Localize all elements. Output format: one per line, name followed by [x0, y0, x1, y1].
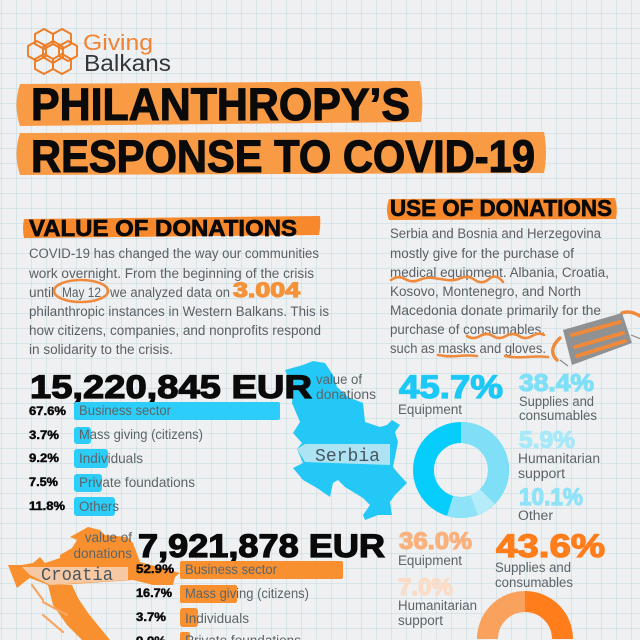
- logo word: Giving: Giving: [83, 30, 153, 55]
- bar labels: Individuals: [185, 611, 249, 626]
- intro paragraph: COVID-19 has changed the way our communities: [29, 246, 319, 261]
- icon: hexagon flower: [28, 29, 77, 74]
- bar labels: Business sector: [79, 403, 171, 418]
- paragraph: Kosovo, Montenegro, and North: [390, 284, 581, 299]
- stat: supplies: 43.6%: [496, 528, 605, 564]
- intro paragraph: how citizens, companies, and nonprofits respond: [29, 323, 321, 338]
- logo word: Balkans: Balkans: [84, 50, 171, 76]
- value caption: donations: [73, 546, 132, 561]
- bar labels: Private foundations: [79, 475, 195, 490]
- bar labels: Mass giving (citizens): [185, 586, 309, 601]
- stat: humanitarian: 5.9%: [519, 427, 575, 454]
- stat: equipment: 36.0%: [399, 528, 472, 555]
- circle around May 12: [54, 280, 108, 302]
- title: [16, 79, 546, 182]
- stat: equipment: [398, 369, 503, 417]
- stat: humanitarian: Humanitarian: [398, 598, 477, 613]
- intro paragraph: until: [29, 285, 54, 300]
- intro paragraph: we analyzed data on: [109, 285, 230, 300]
- panel: use of donations intro: [387, 195, 640, 366]
- stat: humanitarian: [518, 427, 600, 481]
- paragraph: [390, 226, 609, 356]
- stat: humanitarian: 7.0%: [398, 574, 453, 601]
- stat: equipment: 45.7%: [399, 369, 503, 405]
- bar labels: [185, 562, 309, 640]
- stat: supplies: [495, 528, 605, 590]
- Croatia label: Croatia: [41, 566, 113, 586]
- stat: supplies: consumables: [495, 575, 573, 590]
- intro paragraph: May 12: [62, 285, 101, 300]
- heading band: [23, 216, 320, 238]
- logo: Giving Balkans: [28, 29, 171, 76]
- value caption: value of: [316, 372, 362, 387]
- stat: supplies: Supplies and: [495, 560, 571, 575]
- icon: face mask: [553, 312, 640, 366]
- percentages: 11.8%: [29, 501, 65, 513]
- stat: other: 10.1%: [519, 484, 583, 511]
- map: Serbia: [285, 361, 407, 520]
- stat: humanitarian: support: [398, 613, 443, 628]
- bar labels: Individuals: [79, 451, 143, 466]
- stat: humanitarian: Humanitarian: [518, 451, 600, 466]
- percentages: 16.7%: [136, 588, 172, 600]
- paragraph: mostly give for the purchase of: [390, 246, 574, 261]
- bar labels: Mass giving (citizens): [79, 427, 203, 442]
- bars: [74, 402, 280, 516]
- percentages: 67.6%: [29, 406, 66, 418]
- Serbia shape: [285, 361, 407, 520]
- intro paragraph: work overnight. From the beginning of the crisis: [28, 266, 314, 281]
- highlighted number: 3.004: [233, 279, 300, 302]
- donut chart: Serbia: [424, 432, 498, 508]
- paragraph: Macedonia donate primarily for the: [390, 303, 601, 318]
- stat: supplies: Supplies and: [519, 394, 594, 409]
- percentages: 3.7%: [29, 430, 59, 442]
- bars: [180, 561, 343, 640]
- intro paragraph: [28, 246, 329, 357]
- percentages: [29, 406, 66, 513]
- stat: other: Other: [518, 508, 554, 523]
- title line 1: PHILANTHROPY’S: [31, 79, 410, 130]
- percentages: [136, 564, 174, 640]
- stat: equipment: Equipment: [398, 553, 462, 568]
- heading band: [387, 198, 617, 220]
- percentages: 9.2%: [29, 453, 59, 465]
- paragraph: such as masks and gloves.: [390, 341, 546, 356]
- paragraph: Serbia and Bosnia and Herzegovina: [390, 226, 601, 241]
- percentages: 52.9%: [136, 564, 174, 576]
- panel: Serbia use of donations: [398, 369, 600, 523]
- heading: USE OF DONATIONS: [390, 195, 612, 221]
- islands: [32, 585, 67, 632]
- total value: 7,921,878 EUR: [138, 528, 385, 564]
- stat: humanitarian: [398, 574, 477, 628]
- stat: humanitarian: support: [518, 466, 565, 481]
- Serbia label: Serbia: [315, 447, 380, 467]
- bar labels: [79, 403, 203, 514]
- stat: supplies: consumables: [519, 408, 597, 423]
- title band line 1: [16, 81, 422, 126]
- value caption: value of: [85, 530, 132, 545]
- paragraph: medical equipment. Albania, Croatia,: [390, 265, 609, 280]
- value caption: [73, 530, 132, 561]
- stat: other: [518, 484, 583, 523]
- panel: Serbia value bars: [29, 369, 376, 516]
- stat: equipment: Equipment: [398, 402, 462, 417]
- stat: equipment: [398, 528, 472, 568]
- Croatia shape: [8, 527, 180, 588]
- value caption: donations: [316, 387, 376, 402]
- panel: Croatia use of donations: [398, 528, 605, 639]
- panel: Croatia value bars: [73, 528, 385, 640]
- title band line 2: [16, 132, 546, 175]
- map: Croatia: [8, 527, 180, 640]
- intro paragraph: philanthropic instances in Western Balkans. This is: [29, 304, 329, 319]
- donut chart: Croatia: [488, 602, 562, 639]
- value caption: [316, 372, 376, 402]
- Serbia label ribbon: [297, 444, 390, 465]
- bar labels: Business sector: [185, 562, 277, 577]
- total value: 15,220,845 EUR: [30, 369, 312, 405]
- heading: VALUE OF DONATIONS: [29, 215, 297, 241]
- percentages: 3.7%: [136, 612, 166, 624]
- Croatia coast: [48, 585, 110, 640]
- paragraph: purchase of consumables,: [390, 322, 545, 337]
- title line 2: RESPONSE TO COVID-19: [31, 131, 535, 182]
- Croatia label ribbon: [22, 567, 128, 585]
- panel: value of donations intro: [23, 215, 329, 357]
- stat: supplies: [519, 370, 597, 423]
- bar labels: Others: [79, 499, 119, 514]
- stat: supplies: 38.4%: [519, 370, 594, 397]
- intro paragraph: in solidarity to the crisis.: [29, 342, 173, 357]
- squiggle underlines: [391, 277, 548, 357]
- percentages: 7.5%: [29, 477, 58, 489]
